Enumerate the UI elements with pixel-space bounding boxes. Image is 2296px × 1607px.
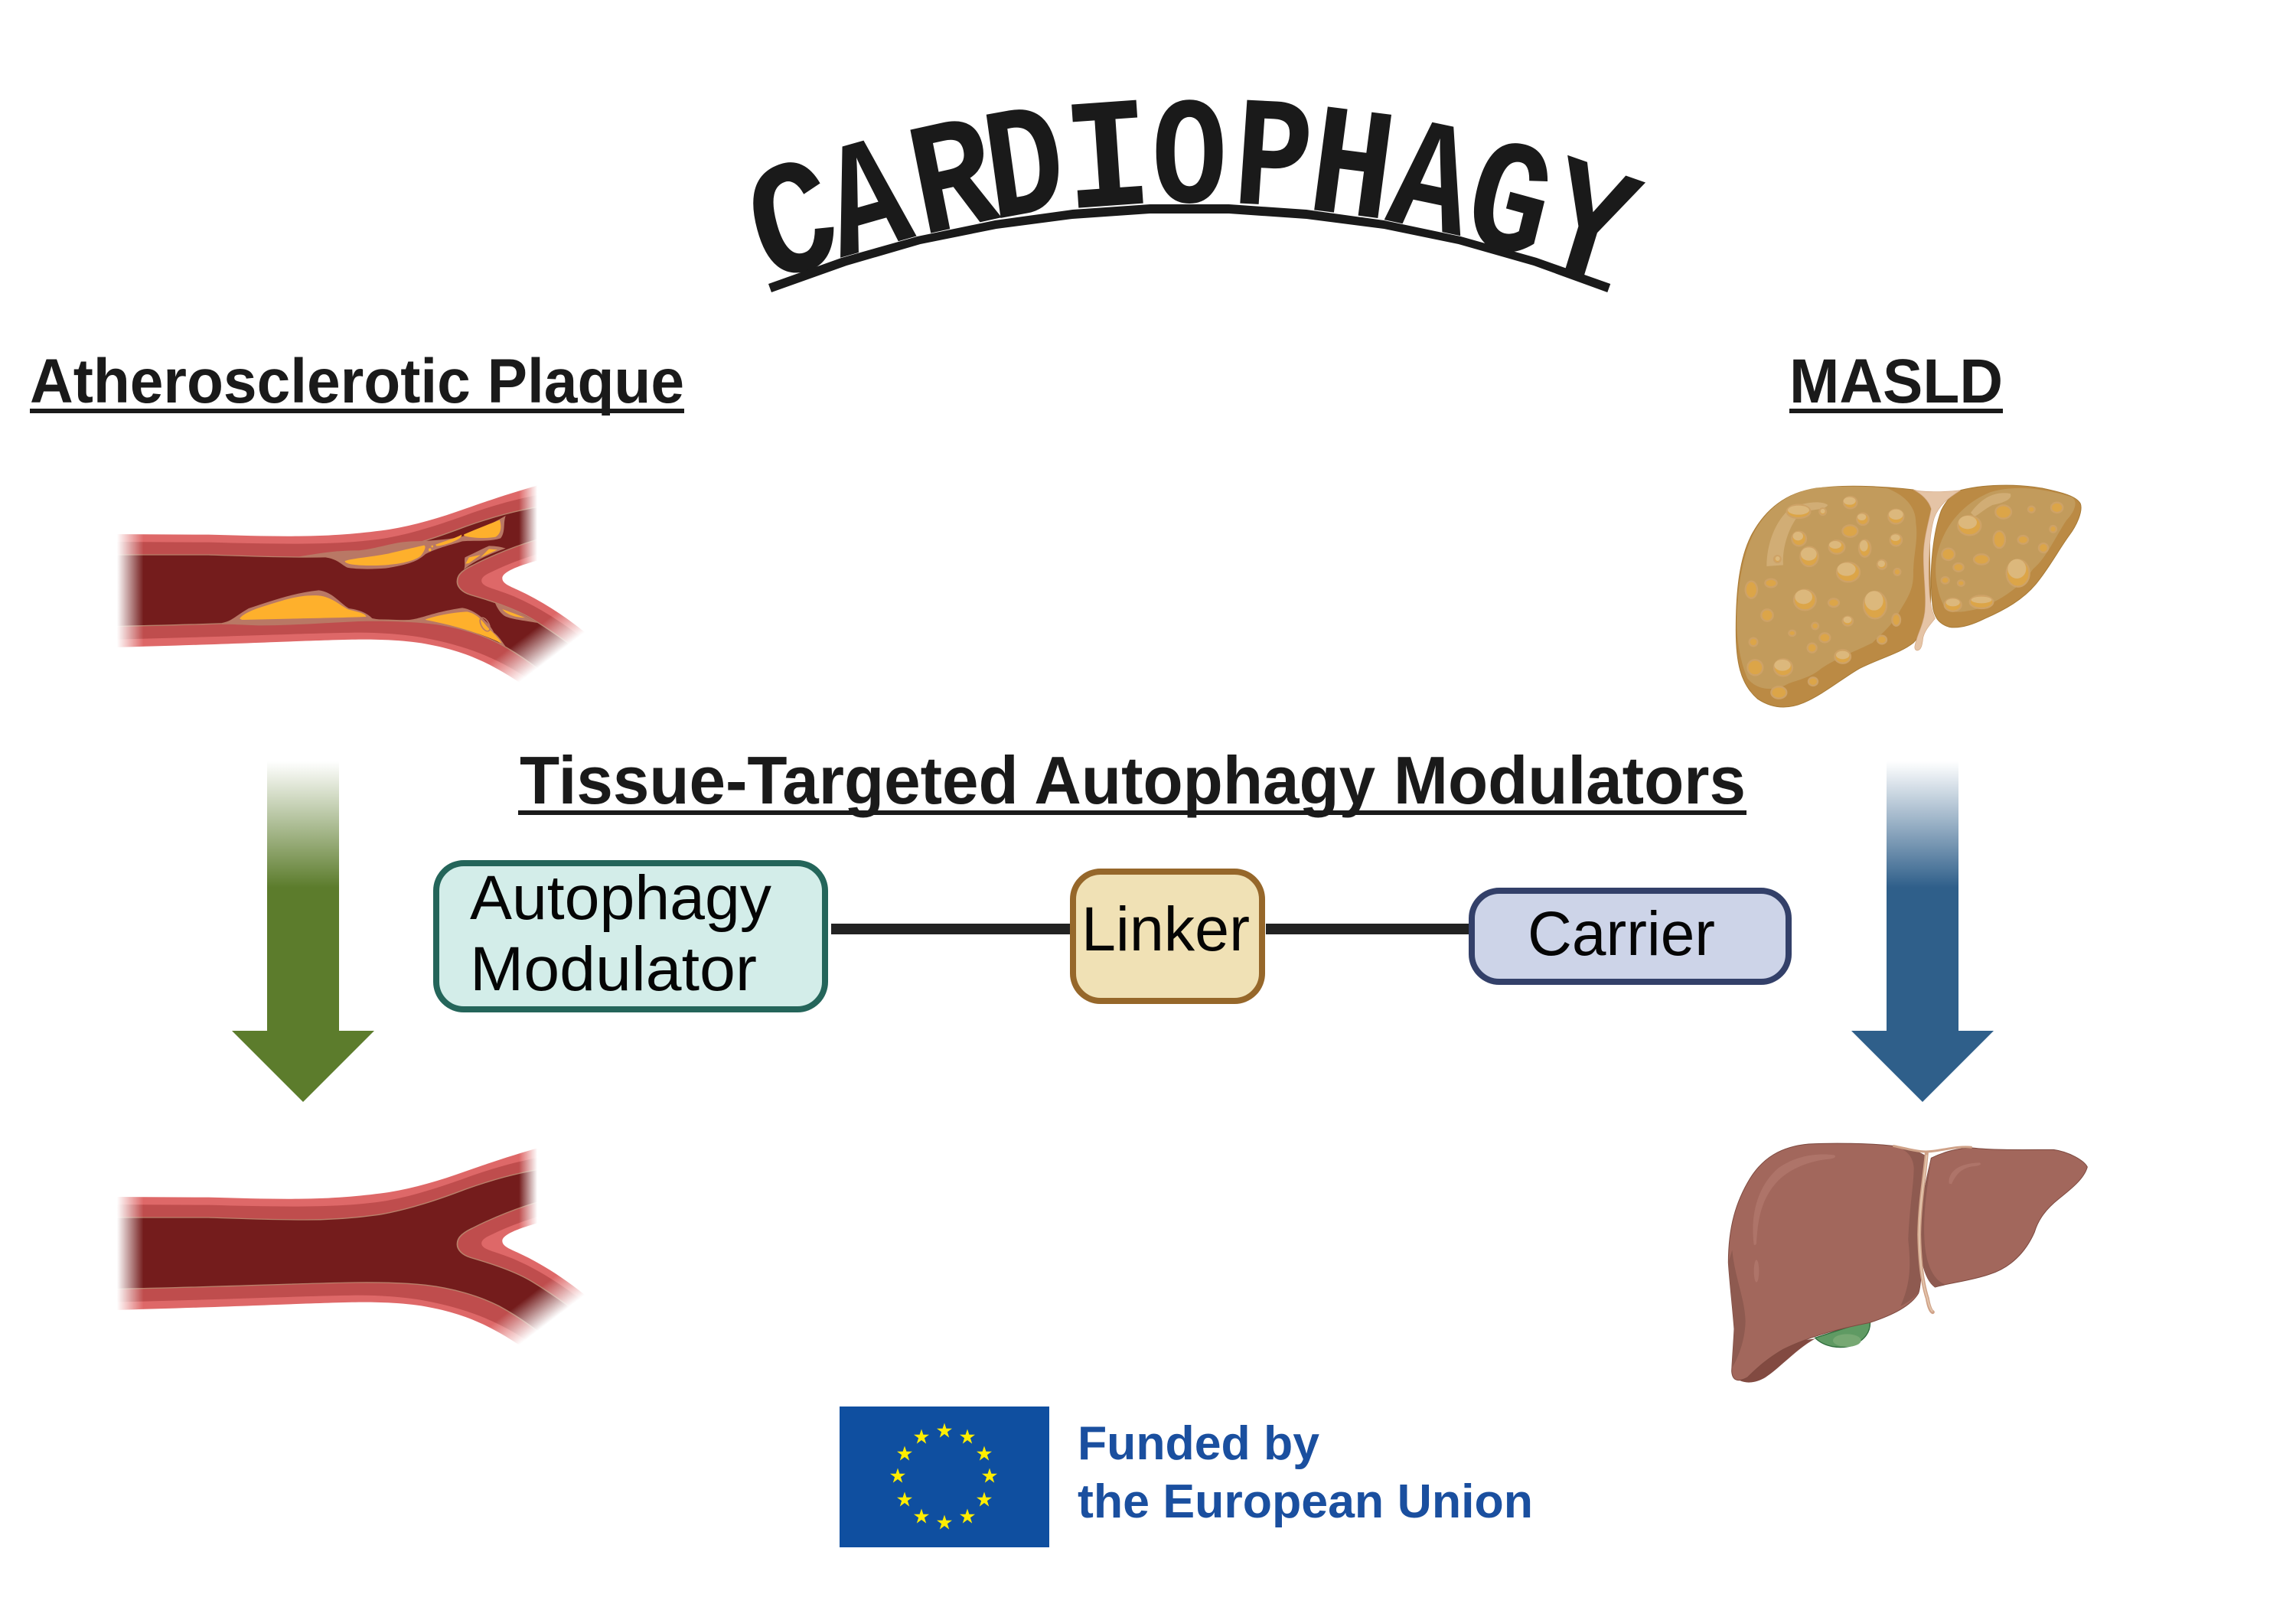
box: Carrier [1472, 891, 1789, 982]
icon: healthy artery [112, 1147, 589, 1349]
droplet highlights [1774, 497, 2026, 671]
heading: Atherosclerotic Plaque: Atherosclerotic Plaque [30, 347, 684, 416]
fat droplets [1746, 497, 2063, 699]
title: CARDIOPHAGY arched wordmark: A [808, 106, 928, 305]
icon: artery with atherosclerotic plaque [112, 484, 589, 686]
box: Carrier: Carrier [1528, 899, 1715, 969]
title: CARDIOPHAGY arched wordmark: R [896, 87, 1012, 283]
connector: linker to carrier [1266, 924, 1473, 934]
title: CARDIOPHAGY arched wordmark: Y [1521, 128, 1654, 334]
title: CARDIOPHAGY arched wordmark: H [1299, 80, 1404, 267]
heading: Tissue-Targeted Autophagy Modulators: Tissue-Targeted Autophagy Modulators [520, 742, 1746, 818]
box: Autophagy Modulator: Modulator [470, 934, 757, 1004]
lipid core deposits [240, 520, 525, 644]
box: Autophagy Modulator [436, 863, 825, 1009]
arrow: green, plaque regression [232, 761, 374, 1102]
connector: modulator to linker [831, 924, 1073, 934]
box: Linker [1073, 872, 1262, 1001]
box: Linker: Linker [1081, 895, 1250, 964]
icon: fatty liver (MASLD) [1736, 485, 2081, 707]
title: CARDIOPHAGY arched wordmark: C [731, 126, 858, 331]
title: CARDIOPHAGY arched wordmark: O [1152, 75, 1227, 248]
title: CARDIOPHAGY arched wordmark [731, 73, 1654, 334]
arrow: blue, liver recovery [1851, 761, 1994, 1102]
heading: MASLD: MASLD [1789, 347, 2003, 416]
box: Autophagy Modulator: Autophagy [470, 863, 771, 933]
title: CARDIOPHAGY arched wordmark: G [1447, 109, 1569, 308]
title: CARDIOPHAGY arched wordmark: I [1058, 73, 1157, 256]
plaque caps [222, 516, 537, 648]
text: EU funding statement [1078, 1417, 1533, 1528]
title: CARDIOPHAGY arched wordmark: D [974, 76, 1076, 267]
title: CARDIOPHAGY arched wordmark: P [1228, 73, 1318, 254]
text: EU funding statement: the European Union [1078, 1475, 1533, 1528]
logo: EU flag [840, 1407, 1049, 1547]
title: CARDIOPHAGY arched wordmark: A [1375, 90, 1487, 284]
icon: healthy liver with gallbladder [1728, 1143, 2087, 1383]
text: EU funding statement: Funded by [1078, 1417, 1320, 1470]
